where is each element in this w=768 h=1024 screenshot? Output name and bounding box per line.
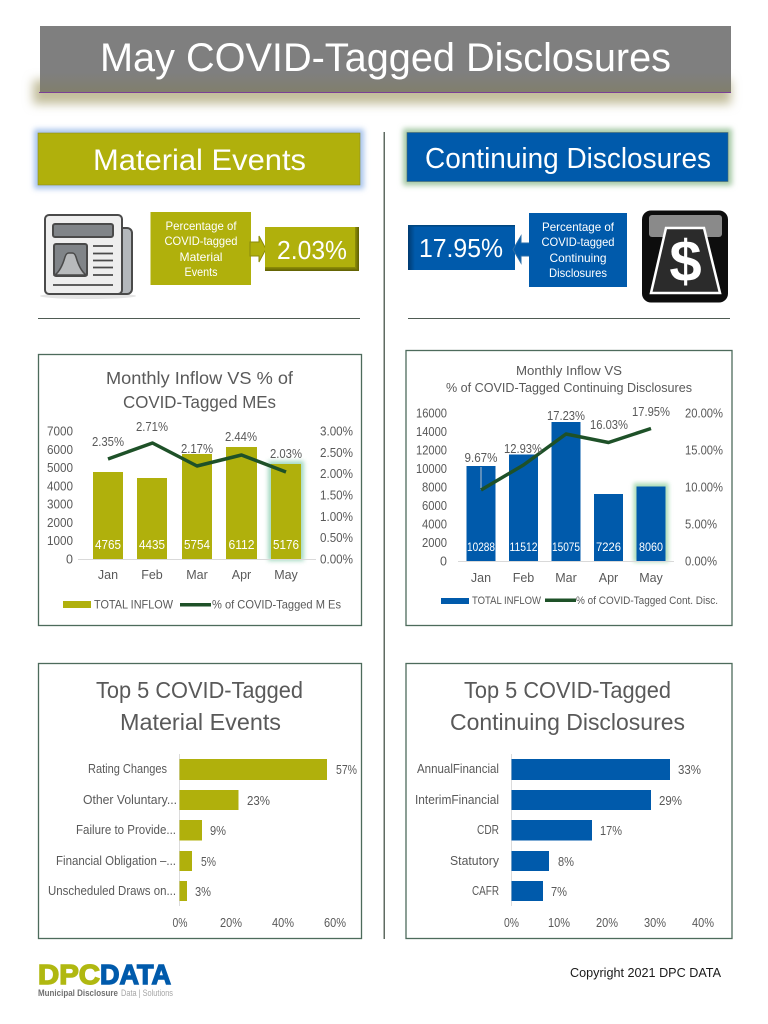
legend: TOTAL INFLOW (94, 598, 174, 612)
bar values: 6112 (228, 538, 255, 552)
icon: dollar slot: $ (669, 229, 702, 294)
stat: 2.03%: 2.03% (277, 235, 347, 265)
arrow: to 2.03% (250, 236, 266, 262)
heading: Material Events (34, 129, 364, 189)
label: percentage of continuing disclosures (529, 213, 627, 287)
bars (78, 447, 316, 561)
bar values: 5176 (273, 538, 299, 552)
logo: DPC DATA: Data | Solutions (121, 988, 173, 998)
bar values: 15075 (552, 540, 580, 554)
logo: DPC DATA: Municipal Disclosure (38, 988, 118, 998)
label: percentage of continuing disclosures: Disclosures (549, 266, 607, 280)
x axis: 40% (272, 916, 294, 930)
panel: top 5 material events (38, 664, 362, 938)
x axis: 10% (548, 916, 570, 930)
label: percentage of material events (150, 212, 251, 285)
label: percentage of continuing disclosures: COVID-tagged (542, 235, 614, 249)
category labels: Rating Changes (88, 762, 167, 776)
bars (458, 422, 674, 562)
x axis: 40% (692, 916, 714, 930)
logo: DPC DATA: DPC (38, 959, 100, 990)
x axis: 0% (172, 916, 188, 930)
bar values (95, 538, 299, 552)
panel: monthly inflow vs material events (38, 354, 362, 626)
label: percentage of material events: COVID-tagged (164, 234, 238, 248)
left axis (47, 424, 73, 566)
month labels: May (274, 568, 299, 582)
title banner: May COVID-Tagged Disclosures (100, 36, 671, 80)
percent labels: 2.17% (181, 442, 213, 456)
month labels: Jan (98, 568, 118, 582)
right axis: 0.50% (320, 531, 353, 545)
left axis: 4000 (47, 479, 73, 493)
bar values: 8060 (639, 540, 663, 554)
stat: 2.03% (265, 227, 359, 271)
bar values: 8% (558, 855, 574, 869)
right axis: 5.00% (685, 518, 717, 532)
bars (511, 754, 670, 906)
percent labels: 2.03% (270, 447, 302, 461)
bar values: 9% (210, 824, 226, 838)
category labels: Failure to Provide... (76, 823, 176, 837)
title banner (33, 26, 731, 104)
bar values (195, 763, 357, 899)
chart title (450, 677, 685, 735)
x axis: 30% (644, 916, 666, 930)
left axis: 0 (66, 552, 73, 566)
label: percentage of material events: Percentage of (166, 219, 237, 233)
category labels (415, 762, 500, 898)
bar values: 7% (551, 885, 567, 899)
percent labels: 2.35% (92, 435, 124, 449)
heading: Material Events: Material Events (93, 144, 306, 177)
right axis: 2.00% (320, 467, 353, 481)
right axis: 3.00% (320, 424, 353, 438)
x axis: 20% (596, 916, 618, 930)
category labels: CAFR (472, 884, 499, 898)
month labels (98, 568, 299, 582)
legend (63, 598, 341, 612)
logo: DPC DATA (38, 959, 173, 998)
bar values (551, 763, 701, 899)
left axis: 16000 (416, 406, 447, 420)
category labels: Unscheduled Draws on... (48, 884, 176, 898)
left axis: 10000 (416, 462, 447, 476)
panel: monthly inflow vs continuing disclosures (406, 350, 732, 626)
month labels: Jan (471, 571, 491, 585)
chart title: Monthly Inflow VS (516, 363, 622, 378)
month labels: May (639, 571, 664, 585)
left axis: 2000 (422, 536, 447, 550)
chart title: Monthly Inflow VS % of (106, 368, 293, 388)
category labels (48, 762, 177, 898)
left axis: 4000 (422, 518, 447, 532)
category labels: CDR (477, 823, 499, 837)
bar values: 5% (201, 855, 216, 869)
left axis: 2000 (47, 516, 73, 530)
month labels: Apr (599, 571, 618, 585)
month labels: Mar (186, 568, 208, 582)
legend: % of COVID-Tagged M Es (212, 598, 341, 612)
right axis: 0.00% (320, 552, 353, 566)
arrow: to 17.95% (513, 236, 530, 263)
right axis: 1.50% (320, 488, 353, 502)
bar values: 17% (600, 824, 622, 838)
label: percentage of continuing disclosures: Continuing (550, 251, 606, 265)
right axis: 2.50% (320, 446, 353, 460)
percent line (481, 428, 651, 490)
icon: newspaper (40, 215, 136, 299)
bar values: 23% (247, 794, 270, 808)
label: percentage of continuing disclosures: Percentage of (542, 220, 615, 234)
right axis (320, 424, 353, 566)
chart title: % of COVID-Tagged Continuing Disclosures (446, 380, 692, 395)
bar values: 4435 (139, 538, 165, 552)
left axis: 6000 (422, 499, 447, 513)
percent labels: 9.67% (464, 451, 498, 465)
bar values: 29% (659, 794, 682, 808)
chart title (446, 363, 692, 395)
left axis: 7000 (47, 424, 73, 438)
category labels: Other Voluntary... (83, 793, 177, 807)
percent labels: 12.93% (504, 442, 542, 456)
label: percentage of material events: Material (180, 250, 222, 264)
legend (441, 595, 718, 607)
bar values: 33% (678, 763, 701, 777)
right axis: 10.00% (685, 480, 723, 494)
category labels: Statutory (450, 854, 500, 868)
right axis: 0.00% (685, 554, 717, 568)
percent labels: 17.23% (547, 409, 585, 423)
heading: Continuing Disclosures (403, 128, 732, 186)
panel: top 5 continuing disclosures (406, 664, 732, 938)
left axis: 8000 (422, 480, 447, 494)
stat: 17.95%: 17.95% (419, 233, 503, 263)
month labels (471, 571, 664, 585)
logo: DPC DATA: DATA (100, 959, 171, 990)
left axis: 14000 (416, 425, 447, 439)
category labels: InterimFinancial (415, 793, 499, 807)
bar values: 57% (336, 763, 357, 777)
chart title: Material Events (120, 709, 281, 735)
bar values (467, 540, 663, 554)
bar values: 7226 (596, 540, 621, 554)
chart title (106, 368, 293, 412)
percent labels: 16.03% (590, 418, 628, 432)
right axis: 15.00% (685, 444, 723, 458)
month labels: Mar (555, 571, 577, 585)
category labels: Financial Obligation –... (56, 854, 176, 868)
legend: TOTAL INFLOW (472, 595, 542, 607)
month labels: Feb (513, 571, 534, 585)
section rule right (408, 318, 730, 319)
left axis: 0 (440, 554, 447, 568)
percent labels: 17.95% (632, 405, 670, 419)
chart title: Continuing Disclosures (450, 709, 685, 735)
left axis: 1000 (47, 534, 73, 548)
percent labels: 2.71% (136, 420, 168, 434)
percent labels (464, 405, 670, 465)
percent labels: 2.44% (225, 430, 257, 444)
percent labels (92, 420, 302, 461)
category labels: AnnualFinancial (417, 762, 499, 776)
bar values: 3% (195, 885, 211, 899)
x axis: 20% (220, 916, 242, 930)
copyright: Copyright 2021 DPC DATA (570, 965, 721, 980)
bar values: 10288 (467, 540, 495, 554)
section rule left (38, 318, 360, 319)
right axis: 20.00% (685, 406, 723, 420)
bar values: 4765 (95, 538, 121, 552)
chart title: Top 5 COVID-Tagged (96, 677, 303, 703)
x axis: 60% (324, 916, 346, 930)
bars (179, 754, 327, 906)
right axis: 1.00% (320, 510, 353, 524)
left axis: 6000 (47, 443, 73, 457)
heading: Continuing Disclosures: Continuing Disclosures (425, 143, 711, 175)
x axis (172, 916, 346, 930)
chart title (96, 677, 303, 735)
x axis: 0% (504, 916, 519, 930)
month labels: Feb (141, 568, 163, 582)
chart title: Top 5 COVID-Tagged (464, 677, 671, 703)
center divider (384, 132, 385, 939)
legend: % of COVID-Tagged Cont. Disc. (576, 595, 718, 607)
x axis (504, 916, 714, 930)
left axis: 5000 (47, 461, 73, 475)
label: percentage of material events: Events (184, 265, 218, 279)
chart title: COVID-Tagged MEs (123, 392, 276, 412)
left axis: 3000 (47, 498, 73, 512)
month labels: Apr (232, 568, 251, 582)
bar values: 11512 (510, 540, 538, 554)
percent line (108, 443, 286, 472)
right axis (685, 406, 723, 568)
left axis: 12000 (416, 444, 447, 458)
bar values: 5754 (184, 538, 210, 552)
icon: dollar slot (642, 210, 728, 302)
stat: 17.95% (408, 225, 515, 270)
left axis (416, 406, 447, 568)
